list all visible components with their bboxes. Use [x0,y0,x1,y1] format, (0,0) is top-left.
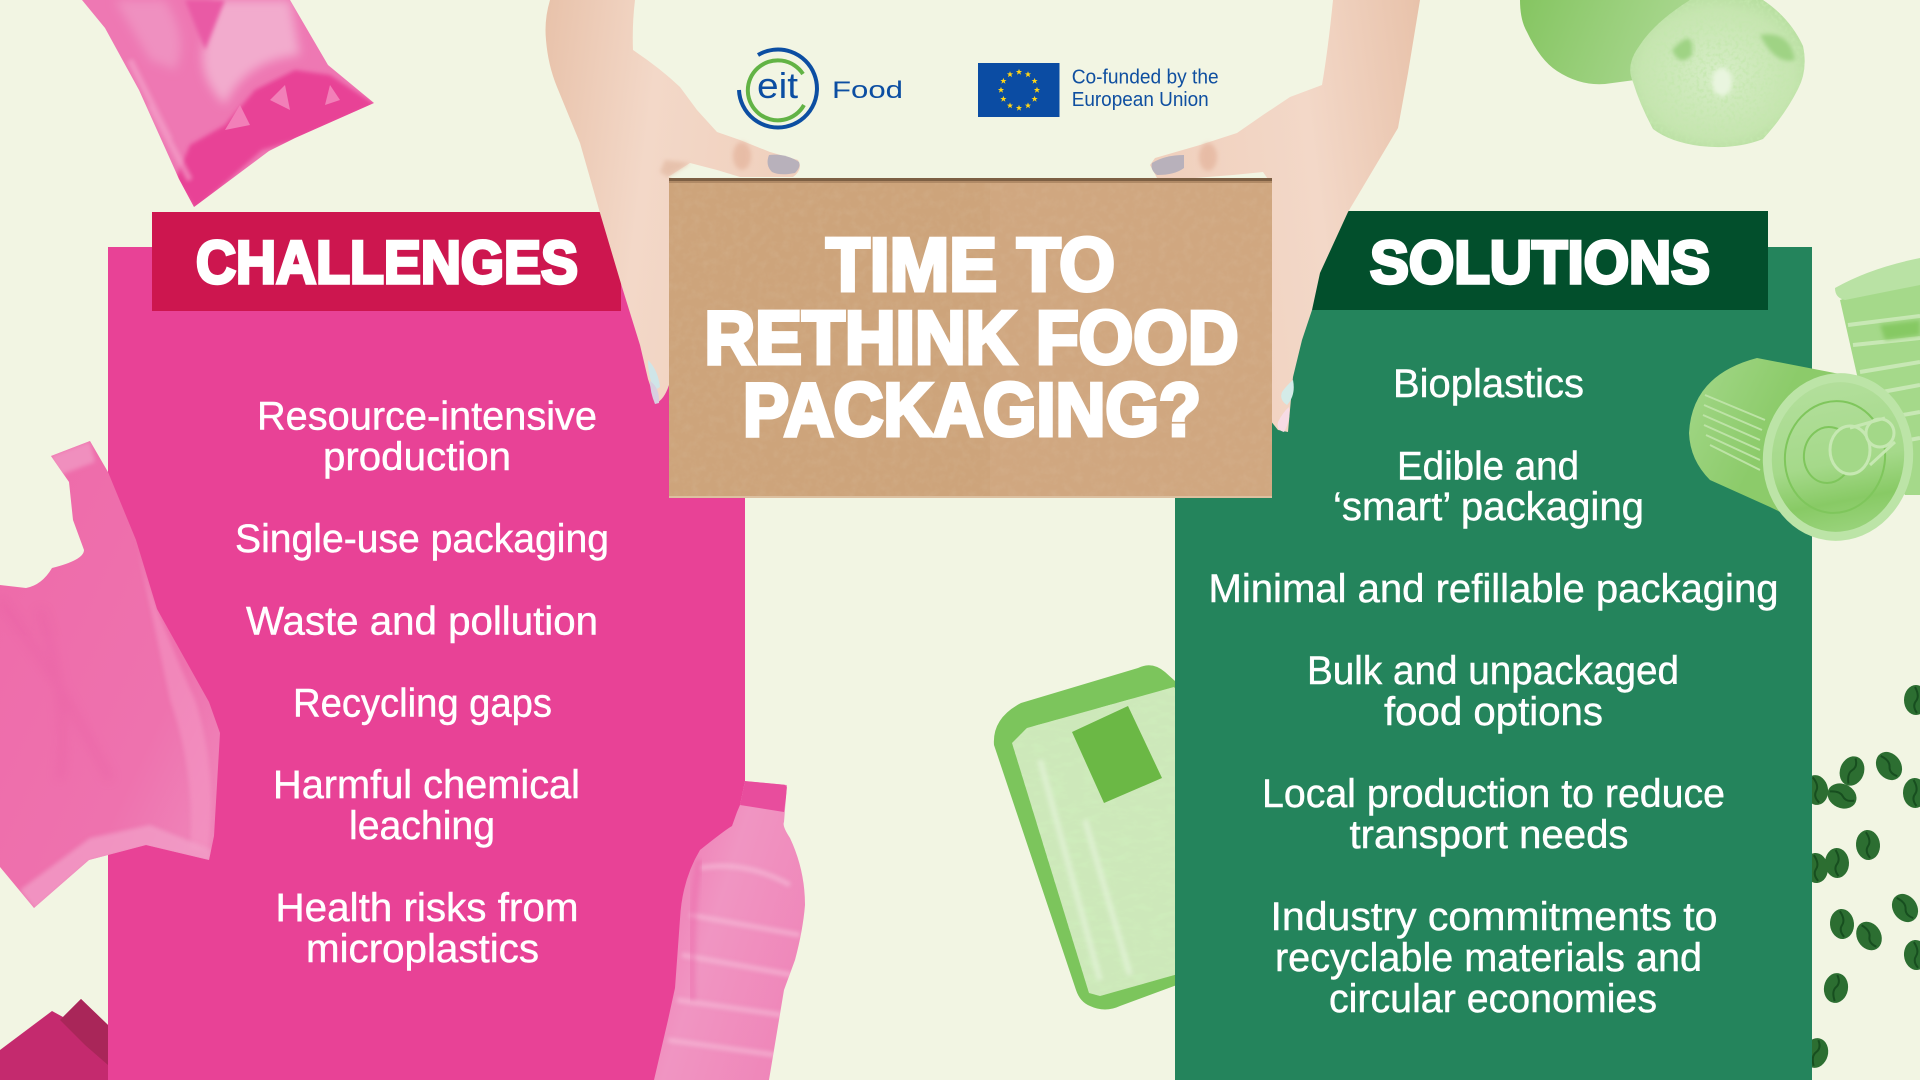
challenges list: Recycling gaps [293,682,552,726]
solutions list: Local production to reduce [1262,772,1725,816]
illustration: plastic cup [1835,258,1920,495]
solutions list: recyclable materials and [1275,936,1702,980]
illustration: pink plastic bag [0,440,225,910]
left finger nails [648,360,660,404]
can lid [1752,363,1920,551]
bottle cap [740,781,787,812]
solutions list: Edible and [1397,444,1579,488]
EU flag [978,63,1060,117]
illustration: green tin can [1689,358,1914,541]
main title: RETHINK FOOD [704,296,1238,380]
food wordmark: Food [832,77,903,104]
solutions list: Minimal and refillable packaging [1208,567,1778,611]
co-funded text: European Union [1072,89,1209,111]
challenges background [108,247,745,1080]
illustration: coffee beans [1801,685,1920,1071]
challenges heading [152,212,621,311]
solutions heading [1290,211,1768,310]
main title [704,223,1238,452]
challenges list: Waste and pollution [246,600,598,644]
illustration: food tray [994,665,1185,1010]
solutions background [1175,247,1812,1080]
challenges list: Resource-intensive [257,394,597,438]
challenges heading: CHALLENGES [196,229,578,296]
logo: EIT Food [739,49,903,127]
solutions list: transport needs [1350,813,1628,857]
solutions list: ‘smart’ packaging [1333,485,1644,529]
challenges list: Health risks from [276,886,578,930]
right finger nails [1278,380,1294,432]
solutions list: food options [1384,690,1603,734]
main title: PACKAGING? [743,368,1201,452]
solutions list [1208,362,1778,1021]
logo: EU co-funded [978,63,1219,117]
challenges list: production [323,435,511,479]
eit wordmark: eit [757,65,798,106]
challenges list [235,394,609,971]
challenges list: Harmful chemical [273,763,580,807]
illustration: pink snack bag [80,0,380,210]
main title: TIME TO [826,223,1115,307]
panel: solutions [1175,211,1812,1080]
solutions list: circular economies [1329,977,1657,1021]
eit rings [739,49,817,127]
challenges list: microplastics [306,927,539,971]
illustration: left hand [546,0,800,403]
co-funded text [1072,66,1219,111]
illustration: dark pink pouch [0,999,108,1080]
left thumb nail [768,155,800,174]
tray label [1072,706,1162,803]
right thumb nail [1152,155,1184,175]
illustration: pink water bottle [650,780,810,1080]
challenges list: Single-use packaging [235,517,609,561]
solutions list: Bioplastics [1393,362,1584,406]
panel: challenges [108,212,745,1080]
solutions list: Industry commitments to [1270,895,1718,939]
solutions heading: SOLUTIONS [1370,229,1710,296]
illustration: right hand [1150,0,1420,432]
co-funded text: Co-funded by the [1072,66,1219,88]
solutions list: Bulk and unpackaged [1307,649,1679,693]
cardboard box [669,178,1272,498]
can pull tab [1830,418,1895,474]
challenges list: leaching [349,804,495,848]
illustration: apple pieces [1520,0,1805,147]
